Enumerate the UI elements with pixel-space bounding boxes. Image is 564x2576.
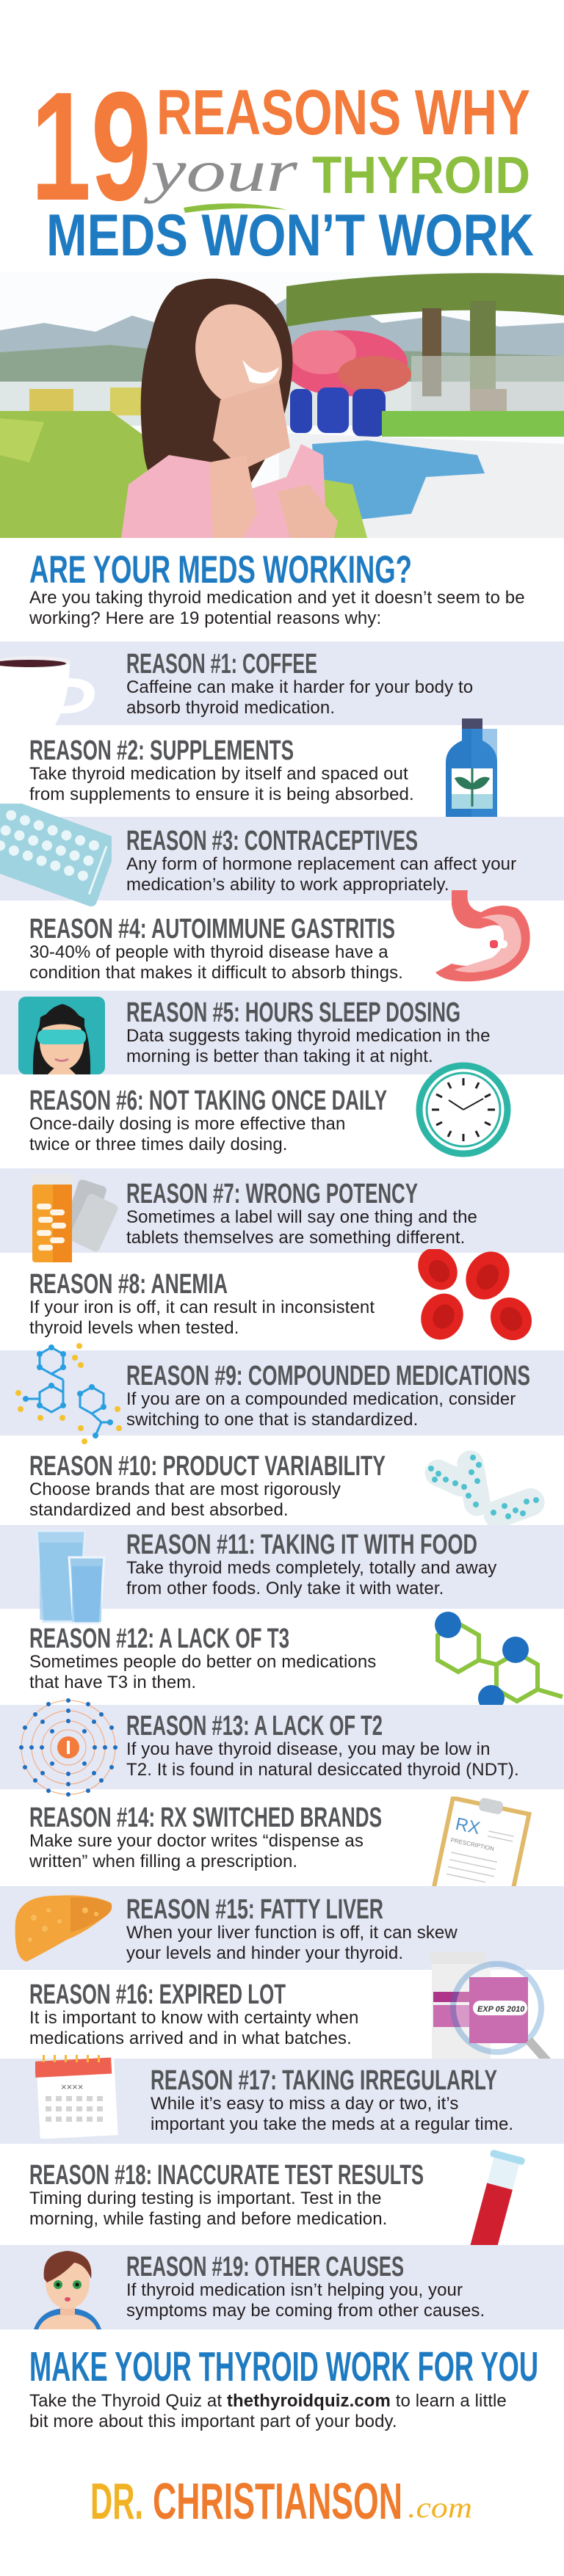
text: reason 4 — [29, 942, 403, 983]
panel: reason 5 — [0, 991, 564, 1074]
text: reason 11: from other foods. Only take it with water. — [126, 1579, 444, 1598]
panel: reason 14 — [0, 1789, 564, 1886]
text: reason 13: T2. It is found in natural desiccated thyroid (NDT). — [126, 1760, 519, 1780]
icon: calendar: ×××× — [61, 2081, 83, 2092]
text: reason 11 — [126, 1558, 496, 1598]
text: reason 14 — [29, 1831, 364, 1872]
title: THYROID — [312, 147, 530, 205]
text: reason 1 — [126, 677, 473, 718]
panel: reason 4 — [0, 900, 564, 991]
icon: liver — [12, 1892, 116, 1964]
panel: reason 11 — [0, 1525, 564, 1609]
text: reason 12: that have T3 in them. — [29, 1673, 196, 1692]
panel: reason 17 — [0, 2059, 564, 2144]
text: reason 5 — [126, 1026, 491, 1066]
text: reason 11: Take thyroid meds completely, totally and away — [126, 1558, 496, 1578]
panel: reason 1 — [0, 641, 564, 725]
text: reason 8: If your iron is off, it can result in inconsistent — [29, 1298, 375, 1317]
panel: reason 2 — [446, 718, 497, 817]
title — [31, 73, 534, 264]
text: reason 17 — [151, 2094, 513, 2135]
icon: molecule — [15, 1343, 122, 1444]
icon: pill bottle — [31, 1174, 118, 1262]
text: reason 7: Sometimes a label will say one thing and the — [126, 1207, 477, 1227]
panel: reason 6 — [0, 1074, 564, 1168]
panel: reason 7 — [0, 1168, 564, 1253]
text: reason 10 — [29, 1480, 341, 1520]
intro text: Are you taking thyroid medication and yet it doesn’t seem to be — [29, 588, 525, 608]
panel: reason 18 — [0, 2144, 564, 2245]
text: reason 13: If you have thyroid disease, you may be low in — [126, 1739, 491, 1759]
text: reason 15: your levels and hinder your thyroid. — [126, 1943, 403, 1963]
text: reason 4: condition that makes it difficult to absorb things. — [29, 963, 403, 983]
text: reason 15: When your liver function is off, it can skew — [126, 1923, 458, 1943]
closing text: Take the Thyroid Quiz at thethyroidquiz.com to learn a little — [29, 2391, 507, 2411]
text: reason 12: Sometimes people do better on medications — [29, 1652, 376, 1672]
text: reason 19 — [126, 2280, 485, 2321]
panel: reason 19 — [0, 2245, 564, 2329]
text: reason 8: thyroid levels when tested. — [29, 1318, 239, 1338]
text: reason 10: Choose brands that are most rigorously — [29, 1480, 341, 1499]
text: reason 3: medication’s ability to work appropriately. — [126, 875, 449, 895]
text: reason 4: 30-40% of people with thyroid disease have a — [29, 942, 388, 962]
text: reason 18 — [29, 2188, 387, 2230]
logo — [0, 2473, 564, 2525]
icon: supplement bottle — [446, 718, 497, 817]
text: reason 7 — [126, 1207, 477, 1248]
closing text — [29, 2391, 507, 2432]
text: reason 2 — [29, 764, 414, 804]
text: reason 17: important you take the meds at a regular time. — [151, 2114, 513, 2134]
text: reason 2: Take thyroid medication by itself and spaced out — [29, 764, 408, 784]
text: reason 5: morning is better than taking it at night. — [126, 1047, 433, 1066]
text: reason 16 — [29, 2008, 358, 2049]
icon: pill pack — [0, 804, 112, 907]
text: reason 13 — [126, 1739, 519, 1780]
icon: green molecule — [435, 1612, 563, 1705]
icon: prescription clipboard: RX — [454, 1814, 482, 1838]
text: reason 3: Any form of hormone replacement can affect your — [126, 854, 516, 874]
text: reason 7: tablets themselves are something different. — [126, 1228, 465, 1248]
icon: prescription clipboard — [423, 1797, 533, 1930]
title: your — [144, 137, 298, 204]
panel: reason 13 — [0, 1705, 564, 1789]
logo: .com — [408, 2491, 472, 2524]
text: reason 19: If thyroid medication isn’t helping you, your — [126, 2280, 463, 2300]
text: reason 16: medications arrived and in what batches. — [29, 2029, 352, 2048]
text: reason 5: Data suggests taking thyroid medication in the — [126, 1026, 491, 1046]
text: reason 14: Make sure your doctor writes “dispense as — [29, 1831, 364, 1851]
panel: reason 16 — [0, 1970, 564, 2059]
text: reason 8 — [29, 1298, 375, 1338]
text: reason 18: morning, while fasting and before medication. — [29, 2209, 387, 2229]
text: reason 18: Timing during testing is important. Test in the — [29, 2188, 382, 2208]
closing text: bit more about this important part of your body. — [29, 2412, 397, 2431]
text: reason 6: twice or three times daily dosing. — [29, 1135, 288, 1154]
panel: reason 12 — [0, 1609, 564, 1705]
icon: test tube — [460, 2147, 527, 2272]
text: reason 14: written” when filling a prescription. — [29, 1852, 297, 1871]
icon: prescription clipboard: PRESCRIPTION — [450, 1837, 495, 1852]
text: reason 2: from supplements to ensure it is being absorbed. — [29, 785, 414, 804]
icon: confused woman face — [34, 2249, 101, 2330]
text: reason 17: While it’s easy to miss a day or two, it’s — [151, 2094, 458, 2114]
icon: clock — [416, 1063, 511, 1157]
icon: red blood cells — [418, 1249, 532, 1340]
icon: expired bottle with magnifier — [427, 1948, 560, 2070]
icon: pills — [424, 1450, 545, 1525]
text: reason 16: It is important to know with certainty when — [29, 2008, 358, 2028]
icon: sleeping woman — [18, 997, 105, 1074]
panel: reason 3 — [0, 817, 564, 900]
hero photo — [0, 273, 564, 538]
icon: stomach — [435, 890, 530, 982]
panel: reason 8 — [0, 1253, 564, 1350]
panel: reason 9 — [0, 1350, 564, 1436]
text: reason 3 — [126, 854, 516, 895]
text: reason 10: standardized and best absorbed. — [29, 1500, 289, 1520]
text: reason 9 — [126, 1389, 516, 1430]
icon: calendar — [35, 2055, 120, 2139]
text: reason 19: symptoms may be coming from other causes. — [126, 2301, 485, 2321]
text: reason 12 — [29, 1652, 376, 1693]
panel: reason 10 — [0, 1436, 564, 1525]
intro text: working? Here are 19 potential reasons why: — [29, 608, 381, 628]
text: reason 6: Once-daily dosing is more effective than — [29, 1114, 345, 1134]
icon: iodine atom — [19, 1698, 118, 1797]
text: reason 1: Caffeine can make it harder for your body to — [126, 677, 473, 697]
text: reason 6 — [29, 1114, 345, 1154]
icon: coffee cup — [0, 656, 95, 725]
text: reason 15 — [126, 1923, 458, 1964]
icon: expired bottle with magnifier: EXP 05 2010 — [477, 2005, 525, 2014]
text: reason 1: absorb thyroid medication. — [126, 698, 335, 718]
panel: reason 15 — [0, 1886, 564, 1970]
text: reason 9: switching to one that is standardized. — [126, 1410, 418, 1430]
icon: water glasses — [38, 1532, 106, 1625]
intro text — [29, 588, 525, 628]
text: reason 9: If you are on a compounded medication, consider — [126, 1389, 516, 1409]
